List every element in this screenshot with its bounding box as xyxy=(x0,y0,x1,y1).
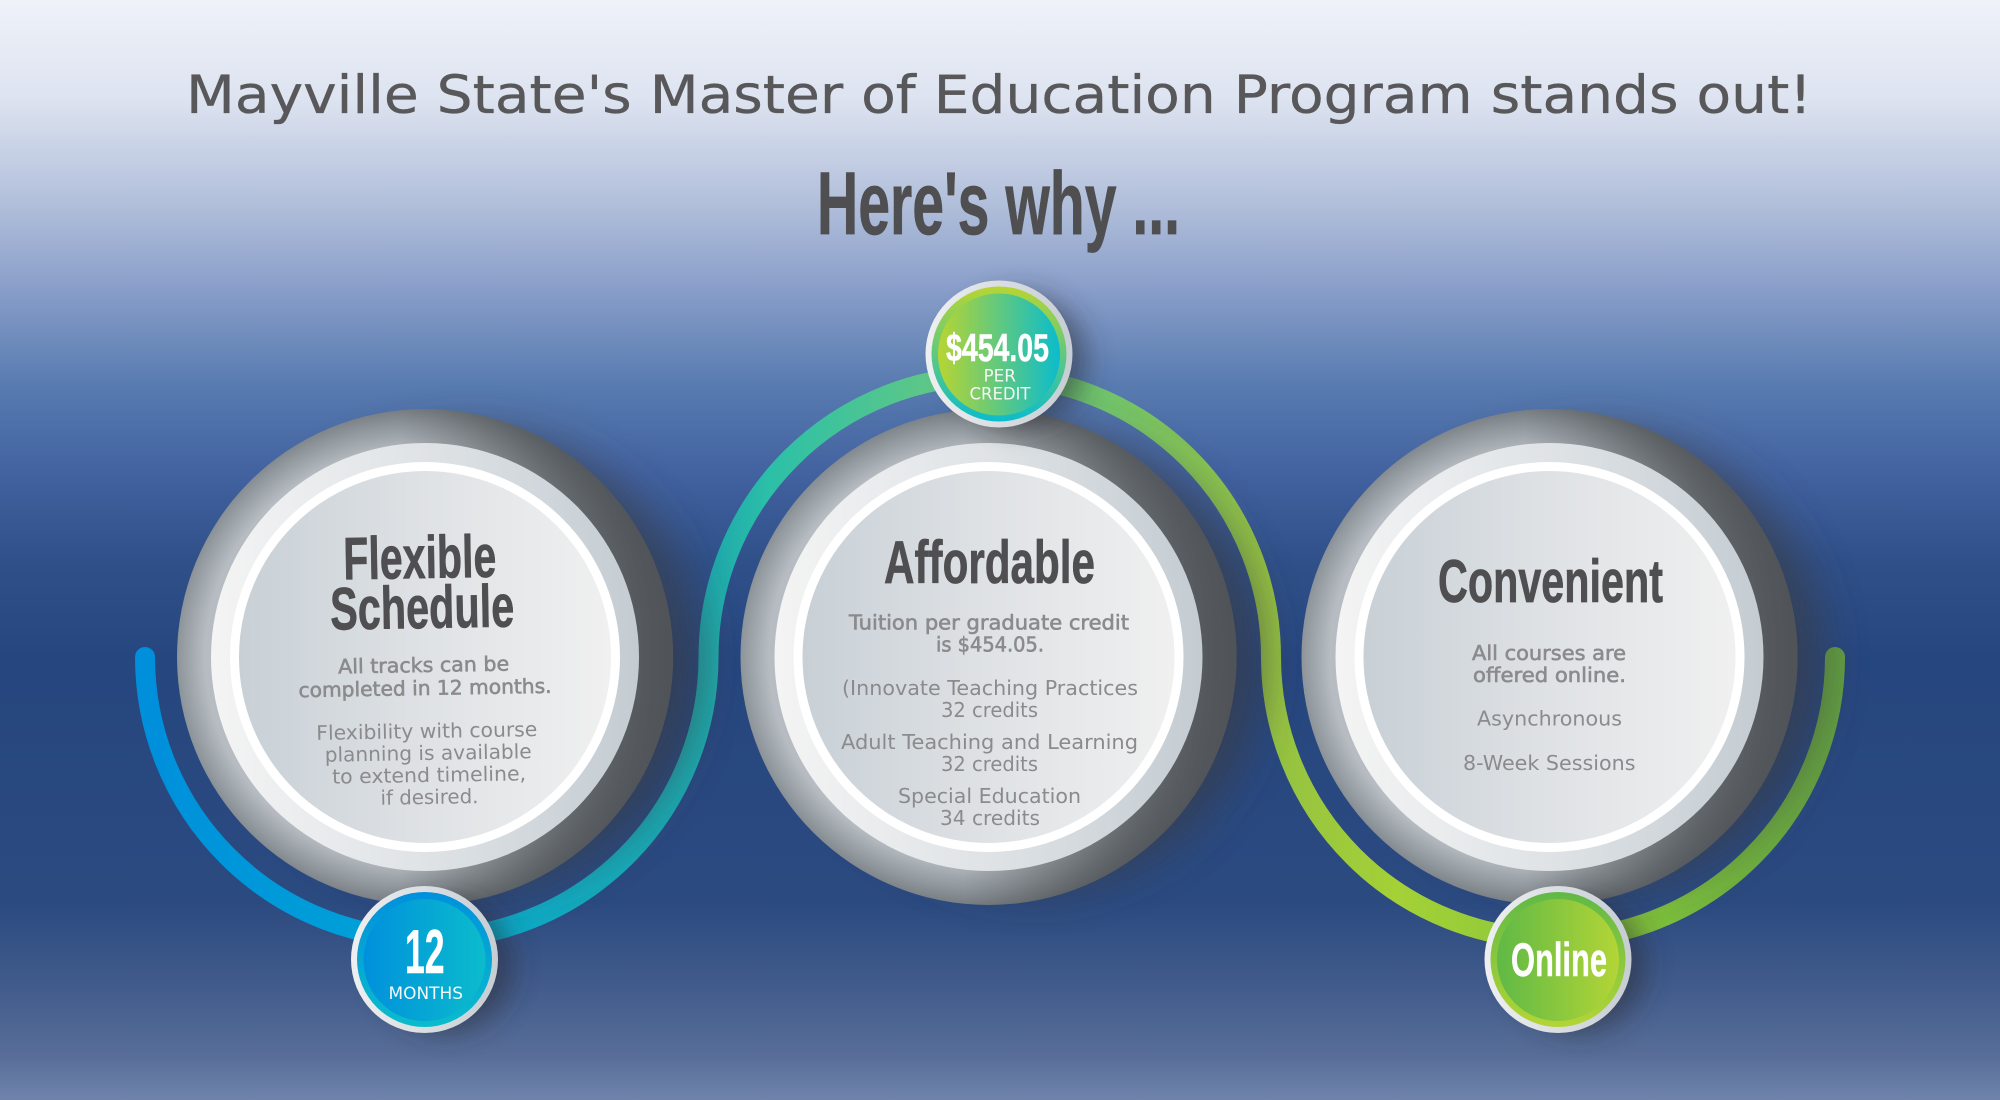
badge: online xyxy=(1484,886,1645,1033)
text block: program credits: 32 credits xyxy=(941,698,1038,722)
badge: 12 months: MONTHS xyxy=(388,984,463,1004)
circle: flexible schedule disc xyxy=(177,409,698,905)
text block: program credits: Special Education xyxy=(898,784,1081,808)
text block: flexibility: planning is available xyxy=(324,739,532,767)
text block: flexibility xyxy=(316,717,539,811)
text block: tuition: Tuition per graduate credit xyxy=(848,610,1129,634)
text: 8-week sessions: 8-Week Sessions xyxy=(1463,751,1636,775)
heading: Here's why: Here's why ... xyxy=(817,153,1180,253)
panel: flexible schedule xyxy=(177,409,698,905)
heading: flexible schedule: Schedule xyxy=(330,572,515,643)
text block: 12 months: completed in 12 months. xyxy=(298,674,552,702)
text block: 12 months xyxy=(298,651,552,702)
title: Mayville State's Master of Education Program stands out! xyxy=(186,65,1812,126)
badge: online: Online xyxy=(1511,933,1607,986)
panel: convenient xyxy=(1302,409,1822,905)
text block: 12 months: All tracks can be xyxy=(338,652,509,679)
badge: price per credit: $454.05 xyxy=(946,327,1049,370)
connector arc: S-curve through all three circles xyxy=(145,376,1835,939)
text block: flexibility: if desired. xyxy=(380,784,479,810)
text block: flexibility: Flexibility with course xyxy=(316,717,537,745)
text block: program credits: 34 credits xyxy=(940,806,1040,830)
text block: online courses xyxy=(1472,641,1626,687)
text block: online courses: All courses are xyxy=(1472,641,1626,665)
text block: online courses: offered online. xyxy=(1473,663,1626,687)
text block: tuition xyxy=(848,610,1129,656)
circle: convenient disc xyxy=(1302,409,1822,905)
heading: flexible schedule: Flexible xyxy=(343,523,497,592)
badge: price per credit: CREDIT xyxy=(970,384,1031,404)
text: asynchronous: Asynchronous xyxy=(1477,706,1622,730)
panel: affordable xyxy=(740,409,1262,905)
text: flexible schedule content xyxy=(296,522,554,811)
text block: program credits: Adult Teaching and Learning xyxy=(841,730,1138,754)
badge: 12 months xyxy=(351,886,512,1033)
text block: flexibility: to extend timeline, xyxy=(332,761,526,789)
heading: convenient: Convenient xyxy=(1438,548,1663,615)
text block: program credits: (Innovate Teaching Practices xyxy=(842,676,1138,700)
badge: price per credit: PER xyxy=(984,366,1016,386)
badge: 12 months: 12 xyxy=(405,918,444,987)
heading: affordable: Affordable xyxy=(884,529,1095,596)
text block: program credits: 32 credits xyxy=(941,752,1038,776)
text block: tuition: is $454.05. xyxy=(936,632,1044,656)
heading: flexible schedule xyxy=(329,522,515,643)
badge: price per credit xyxy=(926,280,1086,428)
text block: program credits xyxy=(841,676,1138,830)
circle: affordable disc xyxy=(740,409,1262,905)
